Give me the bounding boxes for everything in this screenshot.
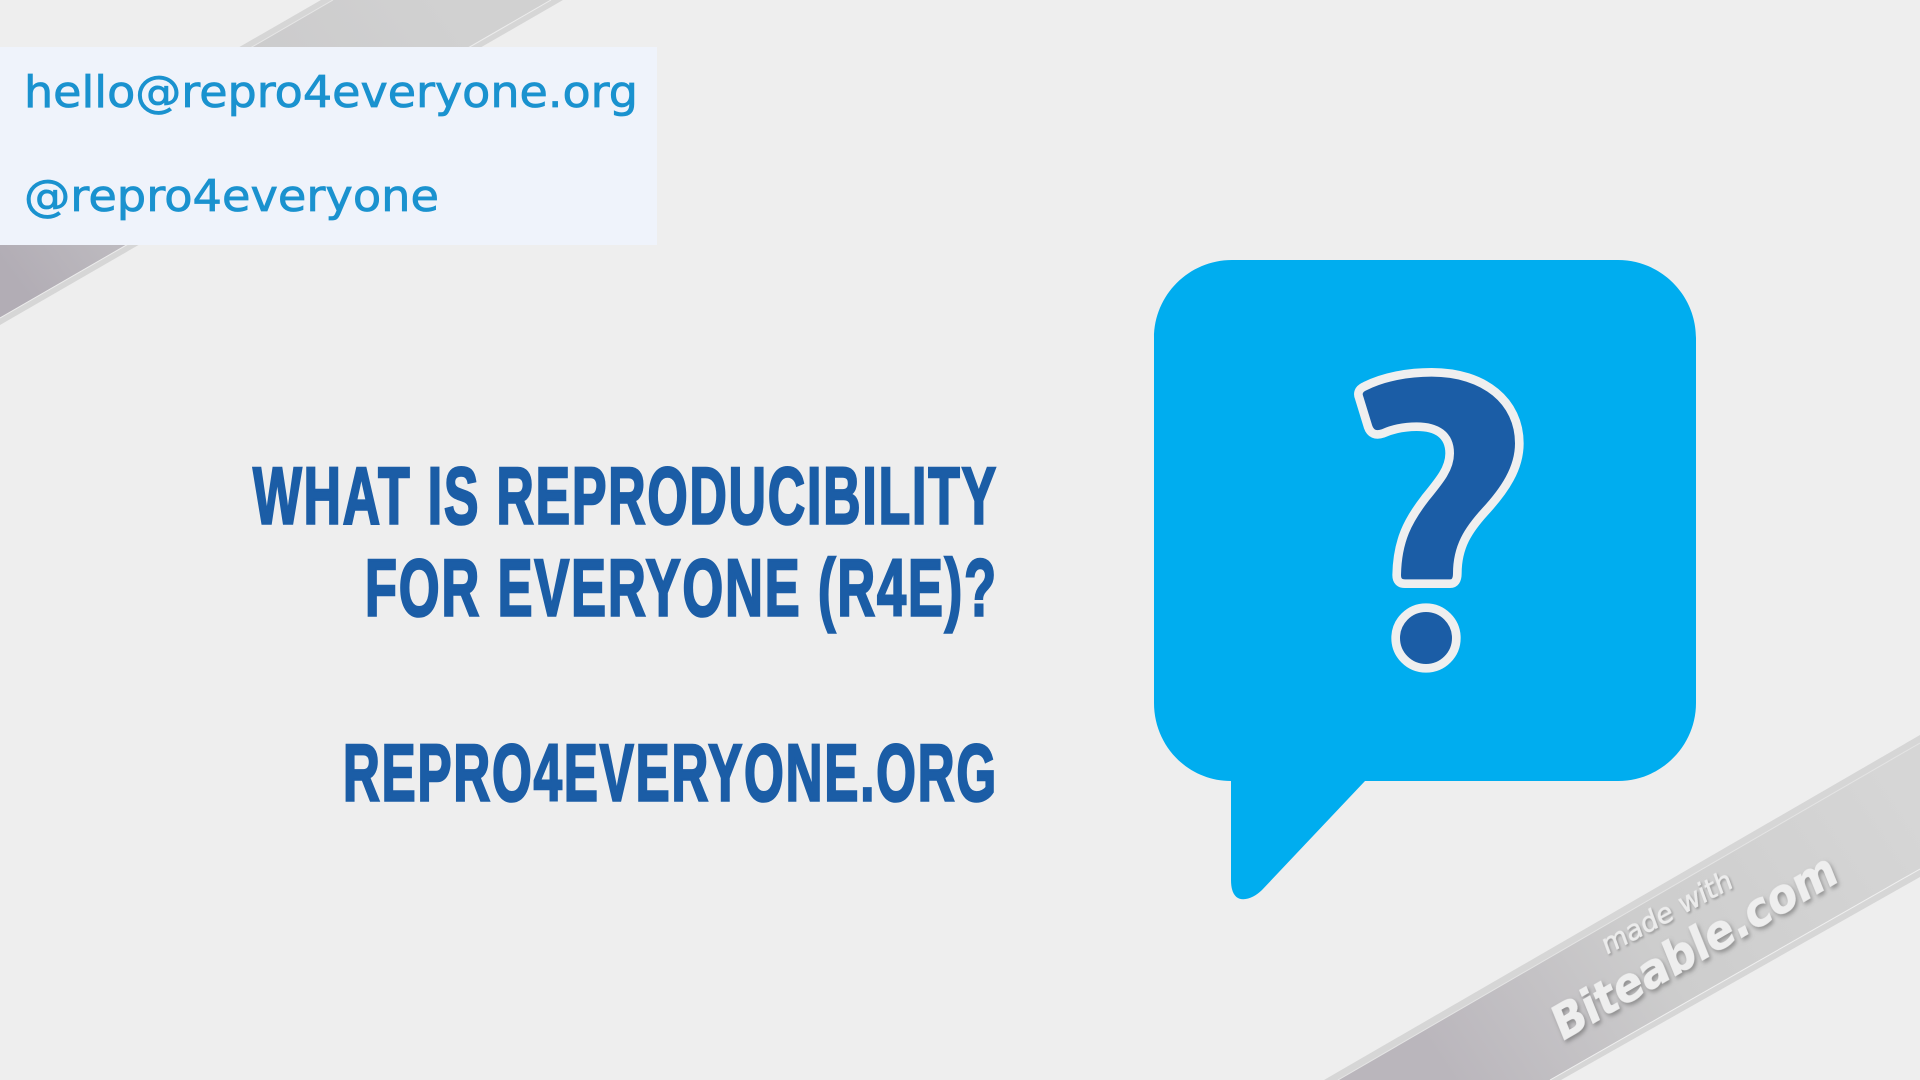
heading bbox=[253, 452, 998, 634]
website url: REPRO4EVERYONE.ORG bbox=[343, 728, 998, 818]
bottom-right diagonal ribbon bbox=[1324, 735, 1920, 1080]
question mark hook bbox=[1358, 372, 1519, 584]
question mark dot bbox=[1396, 608, 1456, 668]
heading line 1: WHAT IS REPRODUCIBILITY bbox=[253, 452, 998, 542]
question mark bbox=[1358, 372, 1519, 668]
panel background bbox=[0, 47, 657, 245]
watermark: Biteable.com: Biteable.com bbox=[1545, 841, 1844, 1053]
heading line 2: FOR EVERYONE (R4E)? bbox=[365, 544, 998, 634]
icon: speech bubble with question mark bbox=[1154, 260, 1696, 899]
watermark: made with: made with bbox=[1598, 864, 1736, 962]
social handle: @repro4everyone bbox=[24, 171, 439, 222]
top-left diagonal ribbon bbox=[0, 0, 563, 325]
contact panel bbox=[0, 47, 657, 245]
speech bubble bbox=[1154, 260, 1696, 899]
email address: hello@repro4everyone.org bbox=[24, 67, 638, 118]
